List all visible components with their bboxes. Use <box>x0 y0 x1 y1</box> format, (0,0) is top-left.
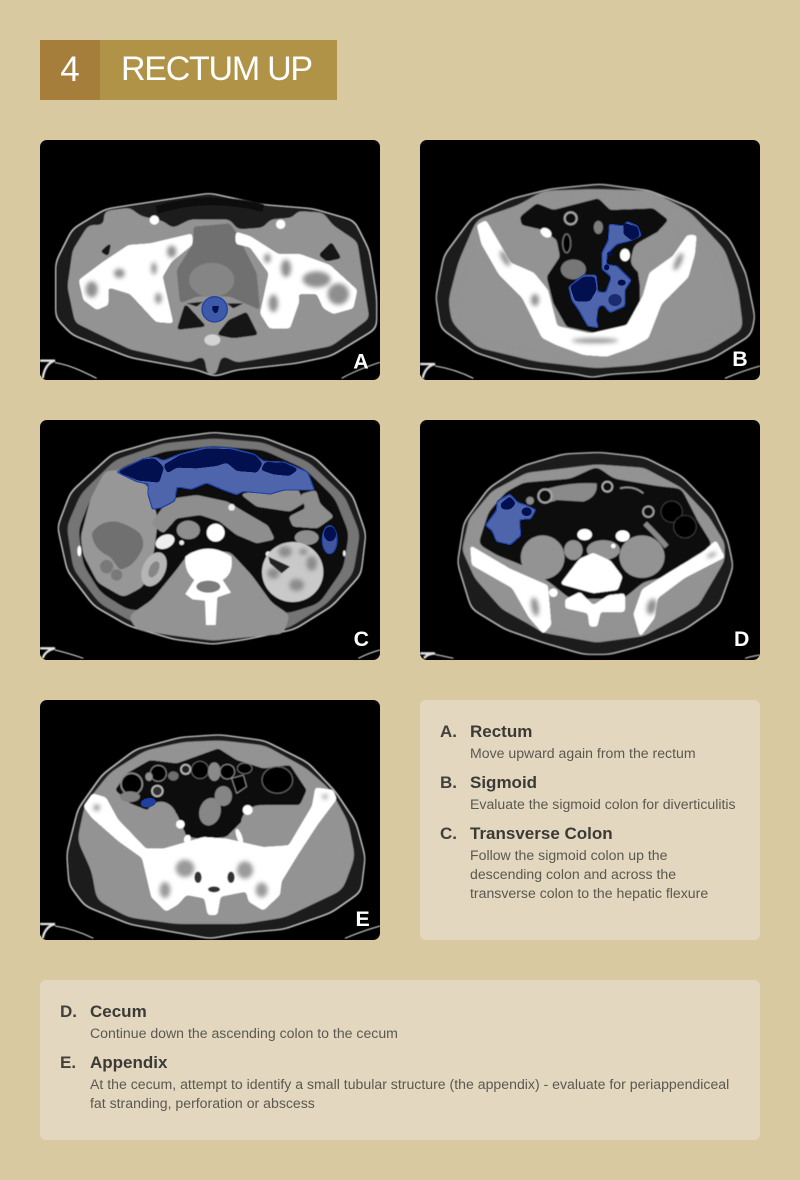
item B: sigmoid: Sigmoid <box>470 773 537 792</box>
label E: E <box>356 907 370 931</box>
bowel and bladder B <box>561 212 603 279</box>
iliac vessels B <box>539 226 630 261</box>
back muscles C <box>128 552 290 641</box>
body outline B <box>435 183 756 378</box>
table C <box>40 648 380 658</box>
heading: RECTUM UP <box>121 50 312 88</box>
item D: cecum: D. <box>60 1002 77 1021</box>
liver with mass <box>81 469 158 597</box>
highlighted appendix <box>141 798 156 808</box>
highlighted cecum <box>485 493 537 545</box>
item D: cecum: Continue down the ascending colon to the cecum <box>90 1025 398 1041</box>
bladder and prostate A <box>177 223 260 310</box>
iliac vessels E <box>176 805 253 845</box>
panel: CT scan B, sigmoid <box>420 140 760 380</box>
panel: CT scan D, cecum <box>420 420 760 660</box>
right hip bone A <box>236 232 357 328</box>
item C: transverse colon: transverse colon to the hepatic flexure <box>470 885 708 901</box>
bowel loops E <box>120 761 293 828</box>
item A: rectum: Rectum <box>470 722 532 741</box>
bowel and pancreas C <box>151 488 334 545</box>
aorta C <box>207 524 225 542</box>
item A: rectum: Move upward again from the rectum <box>470 745 696 761</box>
body outline C <box>57 432 367 645</box>
highlighted sigmoid <box>568 221 642 328</box>
item C: transverse colon: C. <box>440 824 457 843</box>
highlighted transverse colon <box>115 447 337 554</box>
femoral vessels A <box>150 215 285 229</box>
right kidney C <box>136 548 172 590</box>
title banner <box>40 40 337 100</box>
table B <box>420 364 760 378</box>
item E: appendix <box>60 1053 729 1111</box>
table A <box>40 361 380 378</box>
panel: CT scan E, appendix <box>40 700 380 940</box>
item A: rectum <box>440 722 696 761</box>
item E: appendix: At the cecum, attempt to identify a small tubular structure (the appendix) - evaluate for periappendiceal <box>90 1076 729 1092</box>
item B: sigmoid: B. <box>440 773 457 792</box>
body outline D <box>457 452 734 655</box>
abdominal cavity C <box>78 446 349 613</box>
abdominal fat D <box>478 467 713 599</box>
item E: appendix: fat stranding, perforation or abscess <box>90 1095 315 1111</box>
pelvic bones D <box>470 540 725 637</box>
iliopsoas B <box>630 221 695 275</box>
wall muscle D <box>462 464 725 643</box>
item A: rectum: A. <box>440 722 457 741</box>
vertebra and spine C <box>185 549 232 625</box>
item C: transverse colon <box>440 824 708 901</box>
item C: transverse colon: Transverse Colon <box>470 824 613 843</box>
legend card: A to C <box>420 700 760 940</box>
muscle A <box>67 208 369 375</box>
item E: appendix: Appendix <box>90 1053 167 1072</box>
legend card: D and E <box>40 980 760 1140</box>
panel: CT scan A, rectum <box>40 140 380 380</box>
panel: CT scan C, transverse colon <box>40 420 380 660</box>
left kidney C <box>262 542 323 602</box>
abdominal fat E <box>115 748 307 840</box>
item D: cecum: Cecum <box>90 1002 147 1021</box>
left hip bone A <box>79 233 192 323</box>
step number: 4 <box>60 50 80 89</box>
step number <box>40 40 100 100</box>
psoas E <box>144 802 282 842</box>
item E: appendix: E. <box>60 1053 76 1072</box>
pelvic bones E <box>83 787 337 915</box>
bowel loops D <box>526 482 696 547</box>
label B: B <box>732 347 748 371</box>
perirectal fat A <box>100 201 342 338</box>
muscle E <box>77 740 355 924</box>
coccyx A <box>204 334 220 346</box>
abdominal wall C <box>67 438 360 640</box>
label C: C <box>354 627 369 651</box>
item B: sigmoid: Evaluate the sigmoid colon for diverticulitis <box>470 796 736 812</box>
item B: sigmoid <box>440 773 736 812</box>
table E <box>40 924 380 938</box>
table D <box>420 653 760 658</box>
body outline A <box>55 192 377 377</box>
psoas D <box>521 535 665 579</box>
highlighted rectum <box>202 297 227 322</box>
item C: transverse colon: descending colon and across the <box>470 866 676 882</box>
label A: A <box>353 350 369 374</box>
item D: cecum <box>60 1002 398 1041</box>
vessels C <box>77 504 346 557</box>
item C: transverse colon: Follow the sigmoid colon up the <box>470 847 667 863</box>
label D: D <box>734 627 749 651</box>
muscle B <box>448 189 743 368</box>
body outline E <box>66 734 366 939</box>
iliac vessels D <box>549 529 630 597</box>
pelvic bone B <box>477 220 697 357</box>
pelvic fat B <box>520 198 668 333</box>
